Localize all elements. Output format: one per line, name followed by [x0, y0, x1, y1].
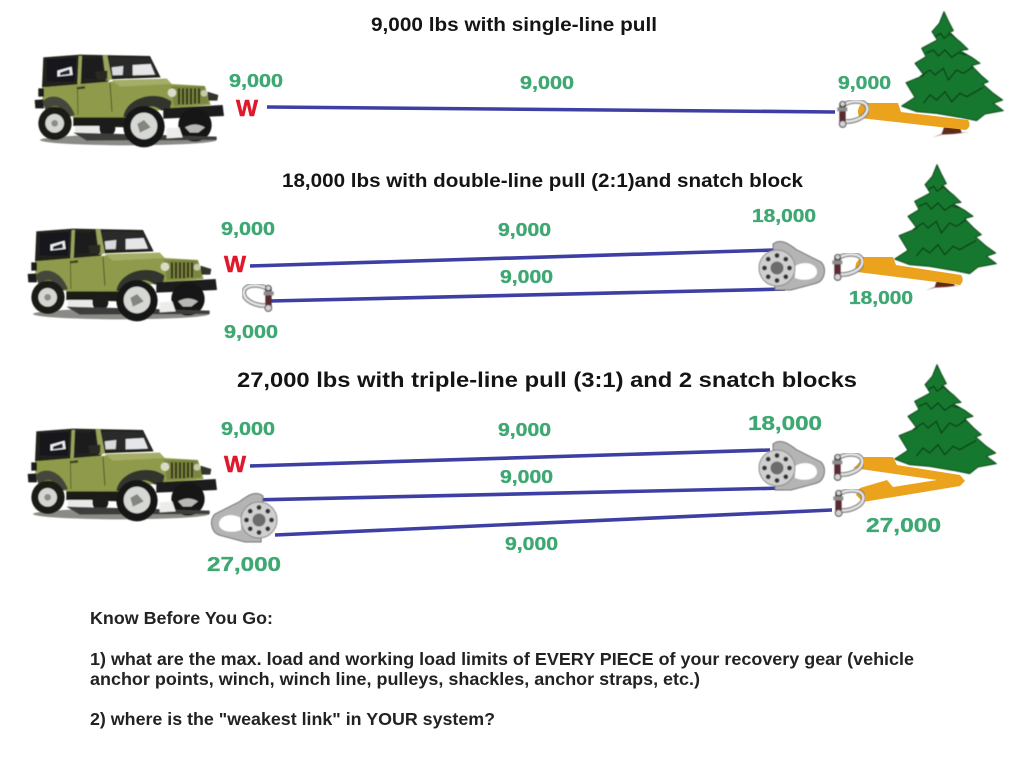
icon: snatch block, anchor side: [759, 442, 824, 490]
icon: snatch block: [759, 242, 824, 290]
load label: anchor: 18,000: [849, 288, 913, 308]
winch marker: W: [224, 451, 246, 477]
icon: shackle: [832, 254, 862, 280]
icon: jeep: [28, 429, 217, 521]
title: double-line pull: 18,000 lbs with double-line pull (2:1)and snatch block: [282, 171, 803, 192]
icon: tree trunk: [926, 280, 963, 290]
icon: snatch block, vehicle side: [212, 494, 277, 542]
load label: bottom line: 9,000: [505, 534, 558, 554]
heading: Know Before You Go:: [90, 608, 273, 628]
load label: anchor: 9,000: [838, 73, 891, 93]
icon: tree: [902, 12, 1003, 121]
winch line: [267, 107, 835, 112]
anchor strap: [855, 257, 963, 285]
load label: snatch block: 18,000: [752, 206, 816, 226]
load label: lower line: 9,000: [500, 267, 553, 287]
load label: line: 9,000: [520, 73, 574, 93]
load label: top line: 9,000: [498, 420, 551, 440]
icon: shackle: [837, 101, 867, 127]
question 1, line 2: anchor points, winch, winch line, pulleys, shackles, anchor straps, etc.): [90, 669, 700, 689]
icon: tree: [895, 365, 996, 474]
title: single-line pull: 9,000 lbs with single-line pull: [371, 15, 657, 36]
winch marker: W: [224, 251, 246, 277]
question 2: 2) where is the "weakest link" in YOUR system?: [90, 709, 495, 729]
title: triple-line pull: 27,000 lbs with triple-line pull (3:1) and 2 snatch blocks: [237, 369, 857, 392]
load label: vehicle block: 27,000: [207, 554, 281, 576]
load label: middle line: 9,000: [500, 467, 553, 487]
load label: winch: 9,000: [221, 419, 275, 439]
load label: anchor: 27,000: [866, 515, 941, 537]
load label: tail: 9,000: [224, 322, 278, 342]
text block: know before you go: [90, 608, 914, 729]
winch line: bottom: [275, 510, 832, 535]
diagram: single-line pull: [35, 12, 1003, 147]
winch line: upper: [250, 250, 775, 266]
load label: snatch block: 18,000: [748, 413, 822, 435]
icon: tail shackle: [244, 285, 274, 311]
icon: jeep: [35, 55, 224, 147]
winch line: middle: [250, 488, 785, 500]
load label: winch: 9,000: [221, 219, 275, 239]
anchor strap: [853, 457, 965, 502]
icon: upper shackle: [832, 454, 862, 480]
question 1, line 1: 1) what are the max. load and working load limits of EVERY PIECE of your recovery gear (vehicle: [90, 649, 914, 669]
diagram: triple-line pull: [28, 365, 996, 576]
icon: jeep: [28, 229, 217, 321]
anchor strap: [858, 103, 970, 130]
winch line: top: [250, 450, 770, 466]
load label: upper line: 9,000: [498, 220, 551, 240]
icon: tree trunk: [933, 127, 970, 137]
load label: winch: 9,000: [229, 71, 283, 91]
winch marker: W: [236, 95, 258, 121]
winch line: lower: [270, 289, 785, 301]
icon: lower shackle: [833, 490, 863, 516]
icon: tree: [895, 165, 996, 274]
diagram: double-line pull: [28, 165, 996, 342]
